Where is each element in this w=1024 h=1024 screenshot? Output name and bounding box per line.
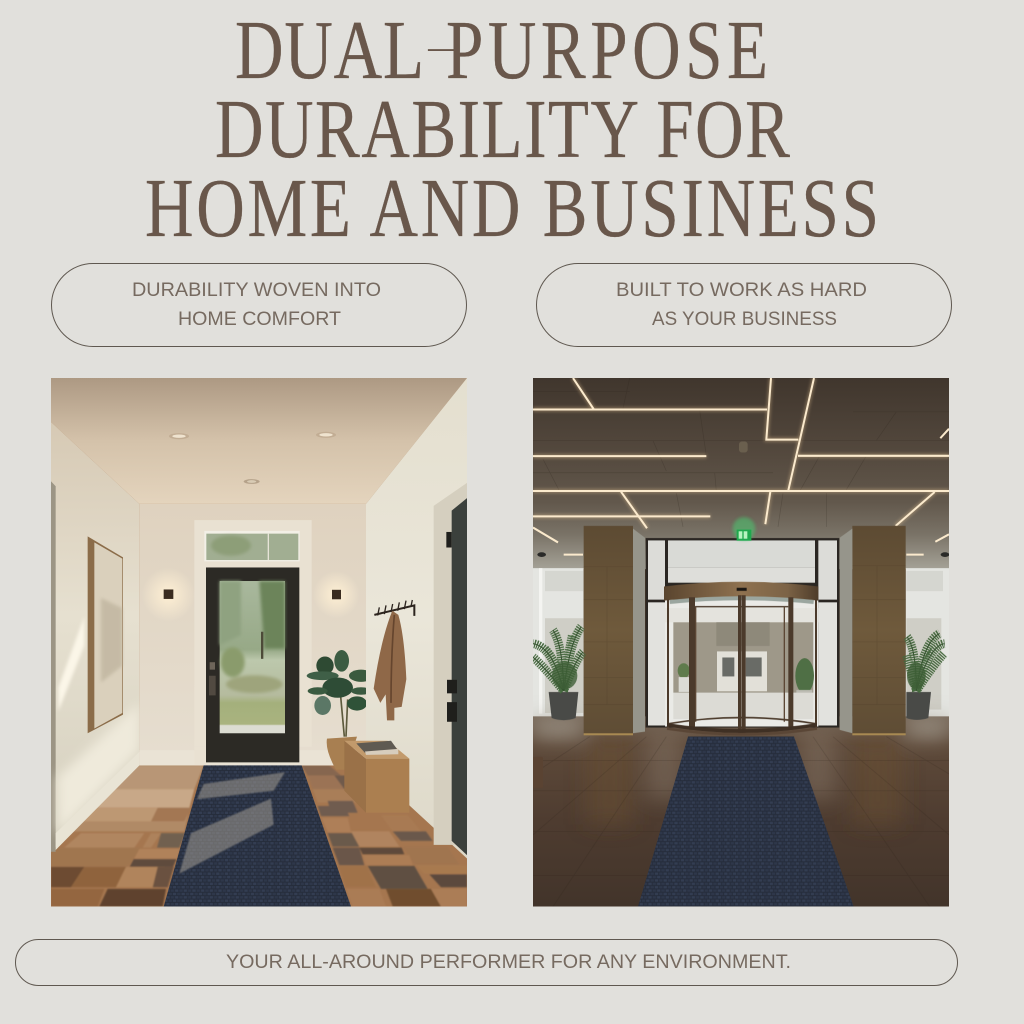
label pill: home comfort: [52, 264, 466, 346]
label pill: business: AS YOUR BUSINESS: [652, 309, 837, 330]
ceiling light highlights: [533, 378, 949, 555]
door trim and front door: [194, 520, 312, 747]
label pill: business: [536, 264, 952, 346]
revolving door: [664, 582, 818, 735]
ceiling: [533, 378, 949, 569]
entrance glazing: [646, 538, 839, 728]
title: DUAL: [235, 4, 424, 97]
title: -: [424, 35, 460, 62]
left wall: [51, 422, 139, 852]
photo: home entryway with runner: [51, 378, 467, 906]
right column: [840, 526, 906, 735]
bench edge: [533, 757, 543, 788]
ceiling: [51, 378, 467, 504]
wall art: [88, 536, 123, 733]
label pill: home comfort: HOME COMFORT: [178, 309, 341, 330]
coat rack and jacket: [374, 600, 414, 720]
right planter: [906, 633, 945, 720]
wooden bench with books: [344, 741, 409, 813]
label pill: home comfort: DURABILITY WOVEN INTO: [132, 280, 381, 301]
houseplant: [307, 650, 373, 770]
security cameras: [537, 552, 949, 557]
door mat: [164, 765, 351, 906]
back wall: [139, 504, 366, 765]
tagline pill: YOUR ALL-AROUND PERFORMER FOR ANY ENVIRONMENT.: [226, 952, 791, 973]
title: HOME AND BUSINESS: [145, 162, 879, 255]
tagline pill: [16, 940, 958, 986]
title: DURABILITY FOR: [215, 83, 790, 176]
photo: commercial lobby with runner: [533, 378, 949, 906]
title: [145, 4, 879, 255]
left planter: [533, 627, 583, 720]
label pill: business: BUILT TO WORK AS HARD: [616, 280, 867, 301]
floor tiles: [51, 765, 467, 906]
right wall: [366, 378, 467, 858]
ceiling panel seams: [533, 378, 949, 527]
title: PURPOSE: [446, 4, 768, 97]
floor: [533, 716, 949, 906]
exit sign: [733, 517, 755, 541]
ceiling sensor: [739, 442, 748, 452]
left column: [584, 526, 645, 735]
side windows: [533, 568, 584, 717]
door mat: [638, 737, 854, 906]
ceiling light lines: [533, 378, 949, 528]
